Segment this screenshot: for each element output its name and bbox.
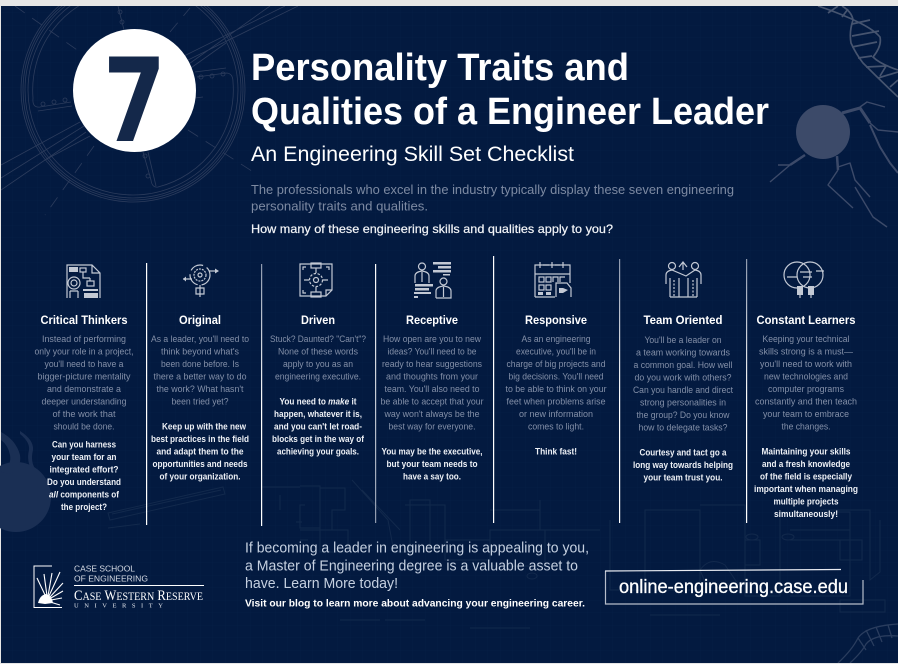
body text [380,334,484,432]
call to action: of your organization. [160,472,240,482]
body text: strong personalities in [640,398,726,408]
body text: the changes. [782,422,830,432]
call to action: and a fresh knowledge [762,459,850,469]
blog link text: Visit our blog to learn more about advancing your engineering career. [245,598,585,610]
icon: overlapping bulbs [784,262,824,298]
heading: Original [179,313,221,327]
url box [605,570,863,604]
number badge: 7: 7 [103,33,166,169]
body text: a team working towards [636,348,730,358]
body text [633,335,733,434]
background: neuron bottom left [0,431,51,532]
body text: charge of big projects and [506,359,606,370]
school name: OF ENGINEERING [74,574,148,584]
call to action: Keep up with the new [162,422,247,432]
body text: how to delegate tasks? [638,422,728,434]
call to action: simultaneously! [774,509,838,519]
body text: the group? Do you know [636,410,730,421]
background: DNA strand top right [818,6,898,97]
body text: skills strong is a must— [759,346,853,358]
body text: comes to light. [528,422,584,432]
intro text: The professionals who excel in the industry typically display these seven engineering [251,182,734,197]
body text: think beyond what's [161,346,239,358]
body text: feet when problems arise [506,396,606,408]
body text: Can you handle and direct [633,385,733,396]
call to action: and you can't let road- [274,422,362,432]
body text: you'll need to have a [44,359,124,370]
heading: Responsive [525,313,587,327]
background: neuron top right [770,102,898,227]
body text: engineering executive. [275,372,361,382]
call to action: Can you harness [52,440,116,450]
icon: calendar [535,262,571,297]
call to action: long way towards helping [633,460,733,470]
panel: Responsive [506,262,607,456]
heading: Receptive [406,313,458,327]
call to action: Courtesy and tact go a [640,448,727,458]
call to action [151,422,249,482]
body text: bigger-picture mentality [38,372,131,382]
panel: Constant Learners [754,262,858,519]
university name: CASE WESTERN RESERVE [74,588,203,604]
call to action: achieving your goals. [277,446,359,456]
title: Qualities of a Engineer Leader [251,91,769,133]
body text [34,334,134,432]
school name [74,564,148,584]
call to action: Maintaining your skills [762,446,850,456]
body text: None of these words [278,346,358,358]
title [251,47,769,133]
call to action: important when managing [754,484,858,494]
call to action: all components of [49,490,120,500]
call to action [272,396,365,456]
call to action: have a say too. [403,472,461,482]
body text: deeper understanding [42,396,126,408]
logo mark [34,566,63,608]
call to action: but your team needs to [386,459,478,469]
body text: constantly and then teach [755,396,857,408]
body text: your team to embrace [763,409,849,420]
closing message [245,540,589,592]
closing message: have. Learn More today! [245,576,398,592]
call to action: opportunities and needs [152,459,248,469]
call to action: best practices in the field [151,434,249,444]
heading: Team Oriented [644,313,722,327]
title: Personality Traits and [251,47,629,89]
icon: circuit document [67,265,100,298]
body text: you'll need to work with [760,359,852,370]
call to action: multiple projects [774,496,838,506]
body text: ready to hear suggestions [382,359,482,370]
call to action: of the field is especially [760,472,853,482]
call to action: and adapt them to the [156,446,244,456]
call to action: your team for an [52,452,117,462]
icon: two people and arrow [666,262,701,297]
body text: You'll be a leader on [644,335,722,346]
panel: Critical Thinkers [34,265,134,512]
heading: Driven [301,313,335,327]
call to action [382,446,482,482]
call to action [633,448,733,482]
logo: Case Western Reserve University [34,564,204,610]
number badge: 7 [73,29,196,169]
body text: As an engineering [522,334,590,345]
body text: a common goal. How well [634,360,732,371]
body text: Instead of performing [42,334,126,345]
body text: the work? What hasn't [156,384,244,395]
call to action: Think fast! [535,446,577,456]
body text: new technologies and [764,372,848,382]
call to action [47,440,121,512]
school name: CASE SCHOOL [74,564,135,574]
body text: apply to you as an [283,359,353,370]
url box: online-engineering.case.edu [619,577,848,598]
background: blueprint drawings [108,480,885,628]
body text: be able to accept that your [380,396,484,408]
call to action: You may be the executive, [382,446,482,456]
body text: been done before. Is [161,359,239,370]
call to action: the project? [61,502,107,512]
call to action: Do you understand [47,477,121,487]
body text: ideas? You'll need to be [388,346,476,358]
intro text [251,182,734,214]
body text: of the work that [52,409,116,420]
panel: Driven [270,263,366,456]
body text: How open are you to new [383,334,481,345]
body text [151,334,249,408]
call to action [754,446,858,519]
intro question: How many of these engineering skills and qualities apply to you? [251,222,613,236]
body text [755,334,857,432]
body text: only your role in a project, [34,346,134,358]
subtitle: An Engineering Skill Set Checklist [251,143,574,166]
icon: gear lightbulb [183,265,219,297]
closing message: a Master of Engineering degree is a valuable asset to [245,558,578,574]
body text: Keeping your technical [762,334,850,345]
body text: to be able to think on your [506,384,607,395]
body text: should be done. [54,422,114,432]
body text [270,334,366,382]
column dividers [146,256,747,526]
body text: big decisions. You'll need [508,372,604,382]
heading: Critical Thinkers [40,313,128,327]
call to action: your team trust you. [644,472,722,482]
body text: As a leader, you'll need to [151,334,249,345]
background: wheel line art [1,0,298,215]
icon: gear in frame [300,263,332,297]
logo: Case Western Reserve University: UNIVERSITY [74,602,163,610]
body text: and thoughts from your [386,372,479,382]
call to action: blocks get in the way of [272,434,365,444]
closing message: If becoming a leader in engineering is appealing to you, [245,540,589,556]
body text: best way for everyone. [388,422,476,432]
body text: there a better way to do [154,372,246,382]
body text: or new information [519,409,593,420]
body text: computer programs [768,384,844,395]
body text: been tried yet? [172,396,228,408]
panel: Receptive [380,262,484,482]
body text [506,334,607,432]
icon: two people talking [414,262,451,298]
intro text: personality traits and qualities. [251,198,428,214]
background: DNA strand bottom right [838,624,898,663]
body text: way won't always be the [384,409,480,420]
heading: Constant Learners [756,313,856,327]
panel: Team Oriented [633,262,733,482]
panel: Original [151,265,249,482]
body text: and demonstrate a [47,384,122,395]
call to action: You need to make it [280,396,356,406]
call to action: integrated effort? [50,464,119,474]
body text: executive, you'll be in [516,346,596,358]
body text: team. You'll also need to [384,384,480,395]
body text: do you work with others? [634,372,732,384]
body text: Stuck? Daunted? "Can't"? [270,334,366,345]
call to action: happen, whatever it is, [274,409,362,419]
